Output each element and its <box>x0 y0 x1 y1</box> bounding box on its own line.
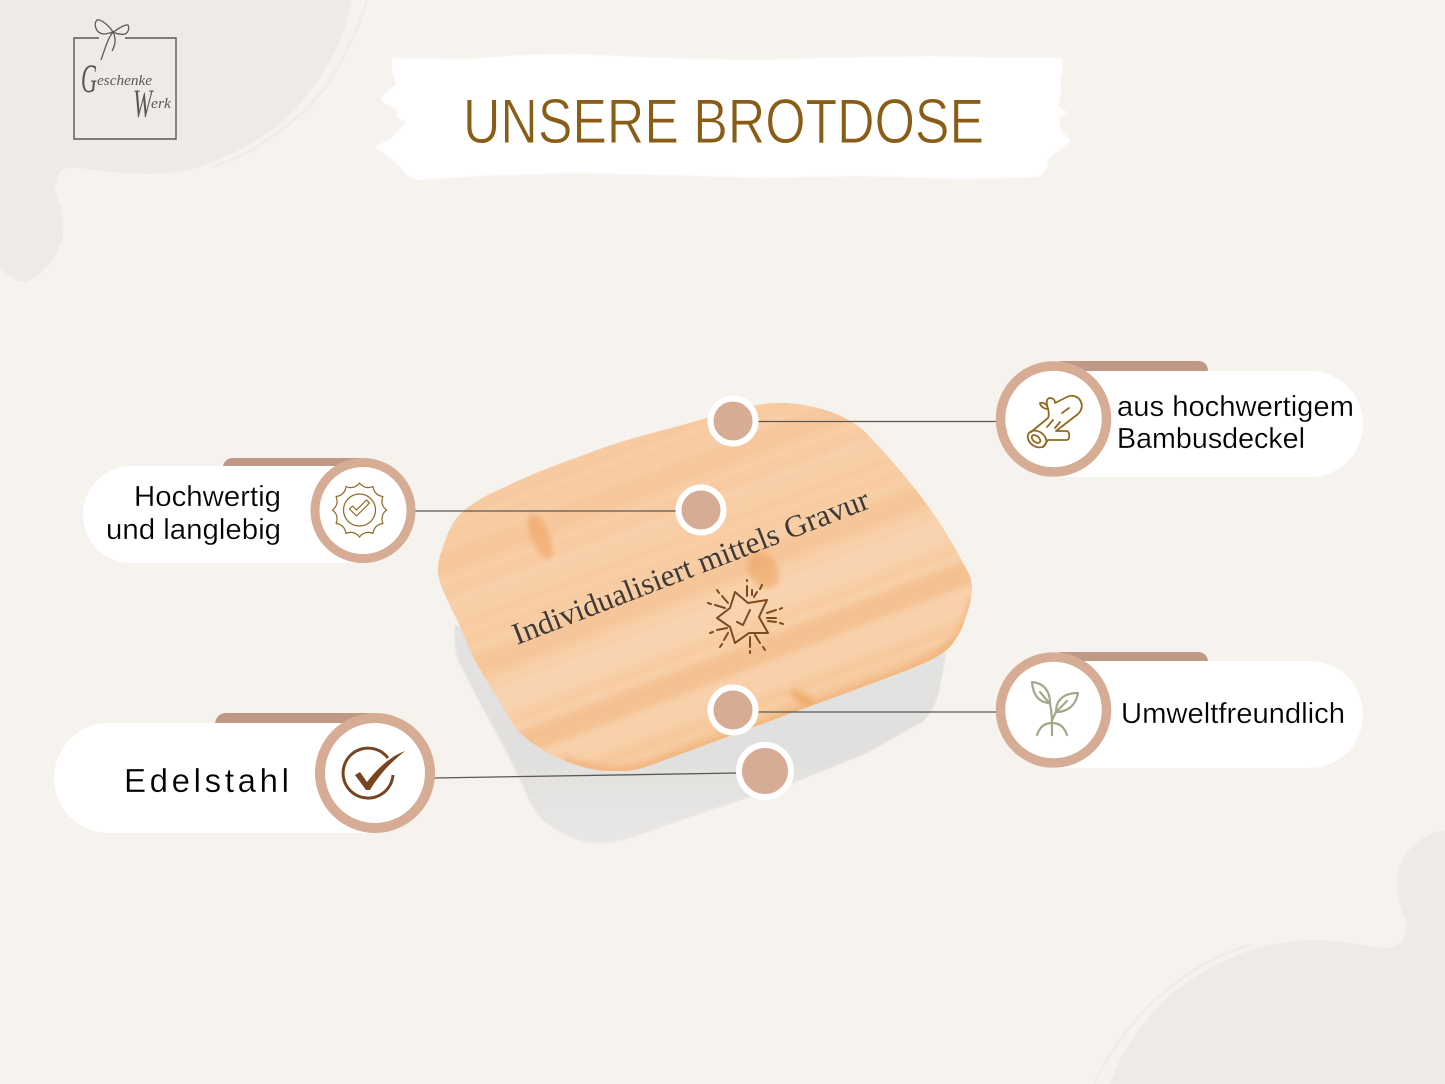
callout: aus hochwertigem Bambusdeckel <box>1000 361 1363 477</box>
pill <box>1050 371 1363 477</box>
marker: lid centre <box>678 488 724 532</box>
tab <box>1060 361 1208 375</box>
label: Edelstahl <box>124 762 289 799</box>
tab <box>223 458 360 470</box>
ring <box>320 718 430 828</box>
marker: steel base <box>739 745 791 797</box>
connector: steel <box>434 773 738 778</box>
callout: Edelstahl <box>54 713 430 833</box>
marker: lid bottom <box>710 688 756 732</box>
lunchbox <box>438 403 972 843</box>
ring <box>1000 366 1106 472</box>
icon: bamboo log <box>1025 396 1082 451</box>
logo wordmark: W <box>133 81 154 126</box>
tab <box>215 713 370 728</box>
ring <box>315 462 411 558</box>
connector: quality <box>415 510 678 512</box>
engraved text: Individualisiert mittels Gravur <box>507 481 874 652</box>
logo wordmark: eschenke <box>97 73 152 89</box>
decorative blob: top left <box>0 0 367 282</box>
ring <box>1000 657 1106 763</box>
logo bow <box>95 20 129 60</box>
label: Hochwertig <box>134 481 281 513</box>
pill <box>83 466 370 563</box>
connector: eco <box>758 711 998 713</box>
pill <box>1050 661 1363 768</box>
label: und langlebig <box>106 514 281 546</box>
logo wordmark <box>81 56 171 126</box>
pill <box>54 723 380 833</box>
marker: lid top <box>710 398 756 444</box>
label: Umweltfreundlich <box>1121 698 1345 730</box>
logo: Geschenke Werk <box>74 20 176 139</box>
decorative blob: bottom right <box>1094 831 1445 1084</box>
icon: check mark <box>343 748 405 798</box>
title: UNSERE BROTDOSE <box>463 87 984 157</box>
logo wordmark: erk <box>151 96 171 112</box>
steel base <box>455 625 946 843</box>
callout: Hochwertig und langlebig <box>83 458 411 563</box>
title brush background <box>374 54 1071 180</box>
icon: quality badge <box>332 483 386 537</box>
engraved star icon <box>708 580 783 653</box>
label: aus hochwertigem <box>1117 391 1354 423</box>
connector: bamboo lid <box>758 420 998 422</box>
logo wordmark: G <box>81 56 97 101</box>
tab <box>1060 652 1208 666</box>
callout: Umweltfreundlich <box>1000 652 1363 768</box>
bamboo lid <box>438 403 972 771</box>
label: Bambusdeckel <box>1117 423 1305 455</box>
icon: sprout <box>1032 682 1078 735</box>
